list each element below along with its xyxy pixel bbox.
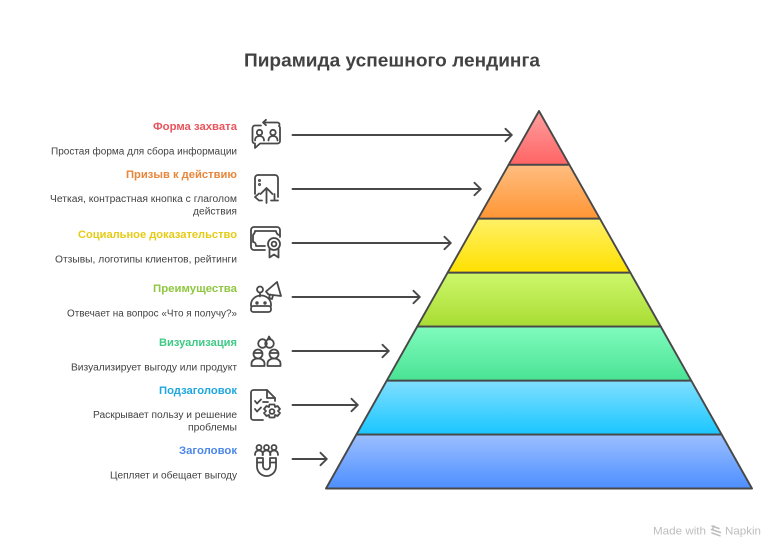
arrow: призыв к действию — [292, 183, 481, 195]
pyramid level: преимущества — [417, 273, 661, 327]
pyramid level: подзаголовок — [356, 381, 722, 435]
pyramid level: социальное доказательство — [448, 219, 630, 273]
pyramid level: форма захвата — [509, 111, 569, 165]
pyramid — [326, 111, 752, 488]
label: визуализация — [71, 337, 237, 374]
description: подзаголовок: Раскрывает пользу и решение — [93, 410, 237, 421]
description: визуализация: Визуализирует выгоду или продукт — [71, 362, 237, 374]
description: преимущества: Отвечает на вопрос «Что я получу?» — [67, 308, 237, 320]
arrow: подзаголовок — [292, 399, 358, 411]
icon: преимущества — [251, 282, 281, 312]
arrow: форма захвата — [292, 129, 512, 141]
icon: заголовок — [255, 445, 278, 476]
description: форма захвата: Простая форма для сбора информации — [51, 146, 237, 158]
description: подзаголовок: проблемы — [188, 422, 237, 434]
label: призыв к действию — [50, 169, 237, 218]
watermark: made with napkin: Napkin — [725, 526, 761, 538]
icon: подзаголовок — [251, 390, 280, 420]
heading: призыв к действию: Призыв к действию — [126, 169, 237, 181]
icon: форма захвата — [252, 120, 280, 148]
icon: визуализация — [252, 336, 280, 366]
heading: подзаголовок: Подзаголовок — [159, 385, 238, 397]
heading: заголовок: Заголовок — [179, 445, 238, 457]
pyramid level: призыв к действию — [478, 165, 600, 219]
label: подзаголовок — [93, 385, 238, 434]
arrow: социальное доказательство — [292, 237, 451, 249]
pyramid level: визуализация — [387, 327, 691, 381]
label: преимущества — [67, 283, 238, 320]
title: Пирамида успешного лендинга — [244, 50, 541, 70]
description: социальное доказательство: Отзывы, логотипы клиентов, рейтинги — [55, 254, 237, 266]
description: заголовок: Цепляет и обещает выгоду — [110, 470, 237, 482]
description: подзаголовок — [93, 410, 237, 434]
description: призыв к действию: действия — [193, 206, 237, 218]
arrow: визуализация — [292, 345, 389, 357]
heading: социальное доказательство: Социальное доказательство — [78, 229, 237, 241]
watermark: made with napkin — [653, 526, 761, 538]
label: форма захвата — [51, 121, 238, 158]
heading: преимущества: Преимущества — [153, 283, 238, 295]
heading: форма захвата: Форма захвата — [153, 121, 238, 133]
arrow: заголовок — [292, 453, 327, 465]
watermark: made with napkin: Made with — [653, 526, 706, 538]
pyramid level: заголовок — [326, 435, 752, 488]
arrow: преимущества — [292, 291, 420, 303]
icon: социальное доказательство — [251, 227, 280, 258]
label: социальное доказательство — [55, 229, 237, 266]
icon: призыв к действию — [255, 175, 278, 203]
heading: визуализация: Визуализация — [159, 337, 237, 349]
description: призыв к действию: Четкая, контрастная кнопка с глаголом — [50, 194, 237, 205]
label: заголовок — [110, 445, 238, 482]
description: призыв к действию — [50, 194, 237, 218]
